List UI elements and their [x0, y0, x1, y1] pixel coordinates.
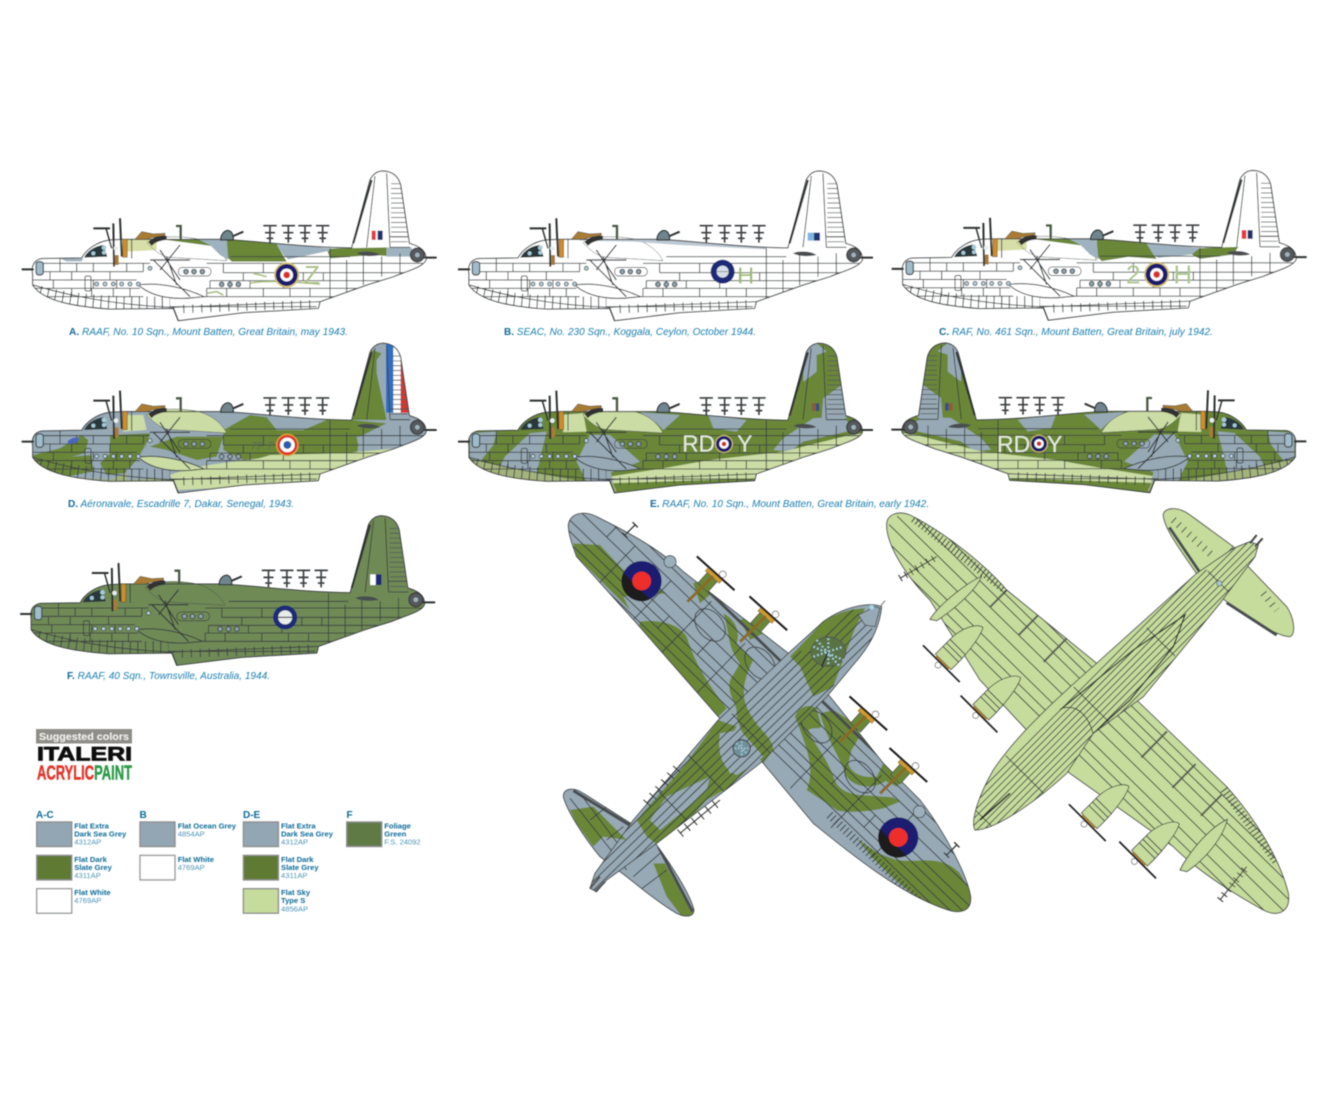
- swatch Flat Dark Slate Grey: Slate Grey: [74, 863, 113, 872]
- fuselage top: [589, 603, 883, 893]
- swatch Flat Extra Dark Sea Grey: [243, 822, 334, 847]
- heading F: F: [346, 810, 353, 821]
- caption C: C. RAF, No. 461 Sqn., Mount Batten, Great Britain, july 1942.: [939, 326, 1213, 338]
- swatch Foliage Green: Foliage: [384, 822, 411, 830]
- roundel B: [711, 260, 735, 284]
- roundel upper wing left: [621, 561, 662, 601]
- swatch Flat Extra Dark Sea Grey: Flat Extra: [281, 822, 316, 830]
- side profile E, port side: [458, 332, 873, 499]
- side profile A: [22, 171, 437, 321]
- engines top: [670, 551, 932, 812]
- side profile B: [458, 171, 873, 321]
- roundel E: [715, 435, 733, 453]
- swatch Flat White: [140, 855, 214, 880]
- legend column F: [346, 810, 421, 847]
- legend column B: [140, 810, 237, 880]
- panel: aircraft F, RAAF 40 Sqn: [20, 516, 435, 682]
- suggested colors band: Suggested colors: [39, 731, 129, 743]
- panel: aircraft E, RAAF No. 10 Sqn, both sides: [458, 332, 1306, 510]
- swatch Flat Dark Slate Grey: Slate Grey: [281, 863, 319, 872]
- legend column A-C: [36, 810, 127, 913]
- panel: aircraft B, SEAC No. 230 Sqn: [458, 171, 873, 338]
- tailplanes underside: [1163, 509, 1294, 637]
- cockpit glazing: [811, 601, 885, 667]
- legend column D-E: [243, 810, 334, 913]
- swatch Flat Extra Dark Sea Grey: [37, 822, 127, 847]
- panel: aircraft D, Aeronavale Escadrille 7: [22, 340, 437, 510]
- swatch Flat Extra Dark Sea Grey: Dark Sea Grey: [74, 830, 127, 838]
- swatch Flat Ocean Grey: [140, 822, 237, 846]
- code letters E starboard: RD: [997, 431, 1030, 457]
- fin flash A: [372, 231, 383, 240]
- fuselage marking D: 7F 7: [251, 441, 274, 453]
- fin flash E starboard: [945, 403, 953, 411]
- floats underside: [930, 576, 1227, 872]
- swatch Flat Dark Slate Grey: Flat Dark: [74, 855, 108, 864]
- code letters C: H: [1173, 259, 1192, 289]
- roundel C: [1144, 262, 1169, 287]
- panel: underside view, sky: [885, 507, 1295, 915]
- swatch Flat Dark Slate Grey: [37, 855, 113, 880]
- wing underside: [867, 491, 1320, 944]
- caption E: E. RAAF, No. 10 Sqn., Mount Batten, Great Britain, early 1942.: [650, 498, 929, 510]
- code letters C: 2: [1126, 259, 1140, 289]
- swatch Flat Sky Type S: [243, 888, 311, 913]
- camouflage traces A: [207, 273, 320, 295]
- heading B: B: [140, 810, 147, 821]
- Italeri wordmark: ITALERI: [37, 744, 132, 766]
- roundel E starboard: [1030, 435, 1048, 453]
- fin flash B: [808, 233, 820, 241]
- swatch Flat Extra Dark Sea Grey: 4312AP: [281, 838, 308, 847]
- swatch Foliage Green: F.S. 24092: [384, 838, 421, 847]
- panel: top view, camouflaged: [562, 512, 972, 918]
- fuselage underside: [972, 540, 1260, 832]
- aerials top: [622, 522, 959, 858]
- panel: aircraft A, RAAF No. 10 Sqn: [22, 171, 437, 338]
- tail guns underside: [1250, 535, 1263, 547]
- swatch Flat Extra Dark Sea Grey: Flat Extra: [74, 822, 110, 830]
- side profile D: [22, 340, 437, 497]
- heading A-C: A-C: [36, 810, 54, 821]
- swatch Flat Dark Slate Grey: Flat Dark: [281, 855, 314, 864]
- swatch Flat White: Flat White: [178, 855, 214, 864]
- swatch Flat White: 4769AP: [178, 863, 205, 872]
- rudder tricolour D: [386, 340, 411, 413]
- side profile E, starboard side: [891, 332, 1306, 499]
- panel: aircraft C, RAF No. 461 Sqn: [892, 170, 1307, 338]
- swatch Flat Extra Dark Sea Grey: 4312AP: [74, 838, 101, 847]
- swatch Flat Ocean Grey: Flat Ocean Grey: [178, 822, 237, 830]
- heading D-E: D-E: [243, 810, 261, 821]
- swatch Flat Ocean Grey: 4854AP: [178, 830, 205, 838]
- swatch Foliage Green: [347, 822, 421, 847]
- swatch Flat Dark Slate Grey: [243, 855, 319, 880]
- turret domes top: [664, 556, 925, 818]
- code letters E: [682, 431, 752, 457]
- swatch Flat White: [37, 888, 111, 913]
- caption B: B. SEAC, No. 230 Sqn., Koggala, Ceylon, October 1944.: [504, 326, 756, 338]
- roundel D: [276, 434, 299, 456]
- code letter B: H: [737, 262, 754, 288]
- code letters C: [1126, 259, 1192, 289]
- swatch Flat Sky Type S: Flat Sky: [281, 888, 311, 897]
- tail guns top: [590, 877, 605, 892]
- caption D: D. Aéronavale, Escadrille 7, Dakar, Senegal, 1943.: [68, 498, 294, 510]
- fin flash E: [812, 403, 819, 411]
- swatch Flat White: 4769AP: [74, 896, 101, 905]
- swatch Flat Dark Slate Grey: 4311AP: [281, 871, 307, 880]
- roundel A: [274, 262, 299, 288]
- swatch Flat Dark Slate Grey: 4311AP: [74, 871, 101, 880]
- swatch Flat Sky Type S: 4856AP: [281, 904, 308, 913]
- caption F: F. RAAF, 40 Sqn., Townsville, Australia, 1944.: [67, 670, 270, 682]
- side profile C: [892, 170, 1307, 320]
- caption A: A. RAAF, No. 10 Sqn., Mount Batten, Great Britain, may 1943.: [69, 326, 348, 338]
- side profile F: [20, 516, 435, 665]
- swatch Foliage Green: Green: [384, 830, 407, 838]
- swatch Flat Sky Type S: Type S: [281, 896, 305, 905]
- fin flash C: [1242, 230, 1253, 239]
- code letters E: RD: [682, 431, 715, 457]
- swatch Flat White: Flat White: [74, 888, 111, 897]
- wing top: [567, 512, 972, 913]
- code letters E: Y: [737, 431, 752, 457]
- aerials underside: [900, 557, 1247, 900]
- logo: Italeri Acrylic Paint: [36, 729, 132, 784]
- swatch Flat Extra Dark Sea Grey: Dark Sea Grey: [281, 830, 334, 838]
- code letter A: Z: [304, 260, 320, 290]
- dorsal turret: [733, 740, 750, 757]
- tailplane top: [562, 788, 696, 918]
- engines underside: [918, 606, 1195, 883]
- roundel F: [273, 605, 297, 629]
- fin flash F: [370, 574, 381, 585]
- roundel upper wing right: [878, 817, 918, 858]
- code letters E starboard: Y: [1047, 431, 1062, 457]
- code letters E starboard: [997, 431, 1062, 457]
- nose emblem D: [67, 436, 80, 445]
- Acrylic Paint wordmark: ACRYLICPAINT: [37, 762, 132, 784]
